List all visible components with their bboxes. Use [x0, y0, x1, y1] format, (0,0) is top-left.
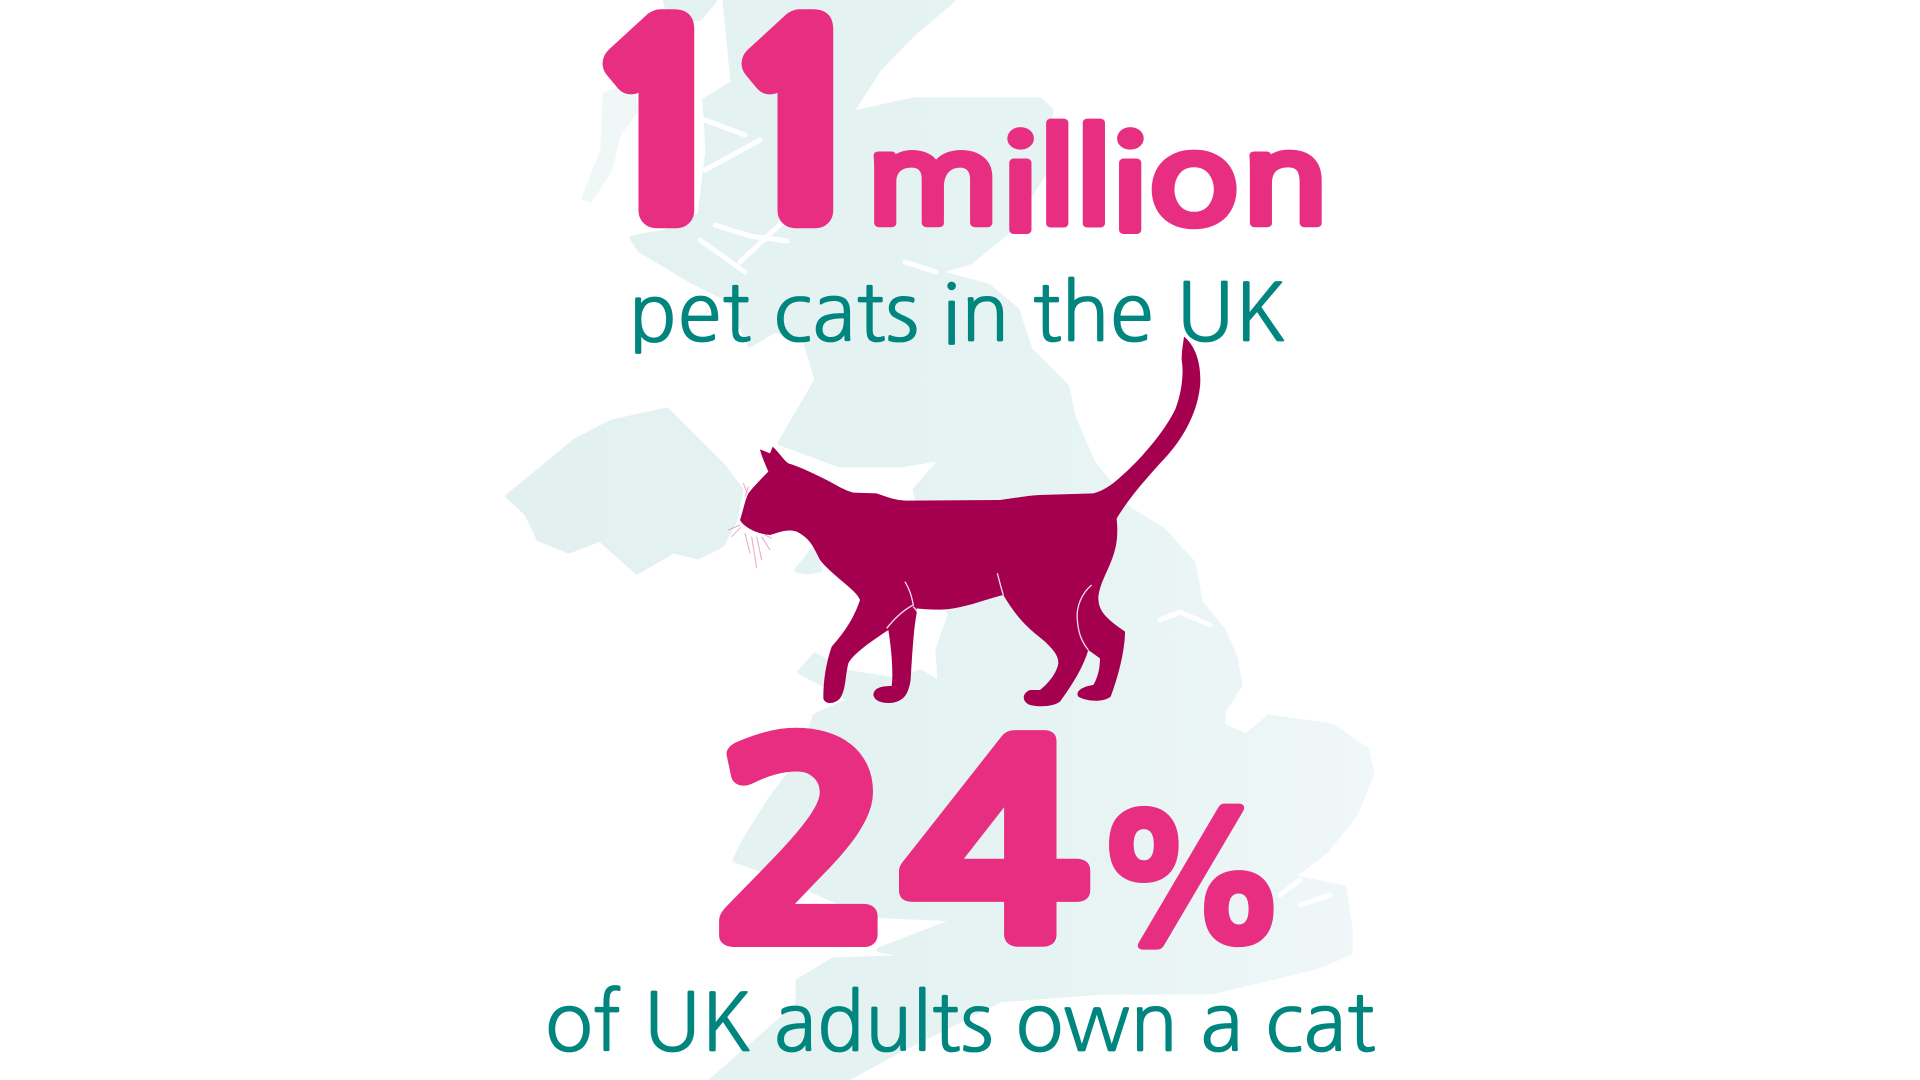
map: Northern Ireland [508, 410, 741, 572]
caption: pet cats in the UK: pet cats in the UK [629, 273, 1286, 353]
map: coastal inlets [700, 120, 1330, 905]
caption: of UK adults own a cat: of UK adults own a cat [545, 983, 1375, 1063]
digit 4: 4 [900, 717, 1090, 978]
map: northwest coast [665, 0, 715, 22]
digit 2: 2 [711, 717, 896, 978]
cat whiskers [728, 483, 772, 568]
headline number: 11: 11 [585, 4, 876, 251]
cat leg highlights [887, 573, 1092, 650]
cat silhouette [728, 337, 1200, 706]
map: Isle of Man [797, 550, 820, 572]
background map of the UK [508, 0, 1372, 1080]
cat body [740, 337, 1200, 706]
map: western isles [584, 85, 636, 200]
map: Great Britain [632, 0, 1372, 1080]
headline number: 24 [711, 717, 1090, 978]
headline unit: million: million [864, 118, 1331, 245]
headline unit: percent sign: % [1091, 798, 1292, 971]
